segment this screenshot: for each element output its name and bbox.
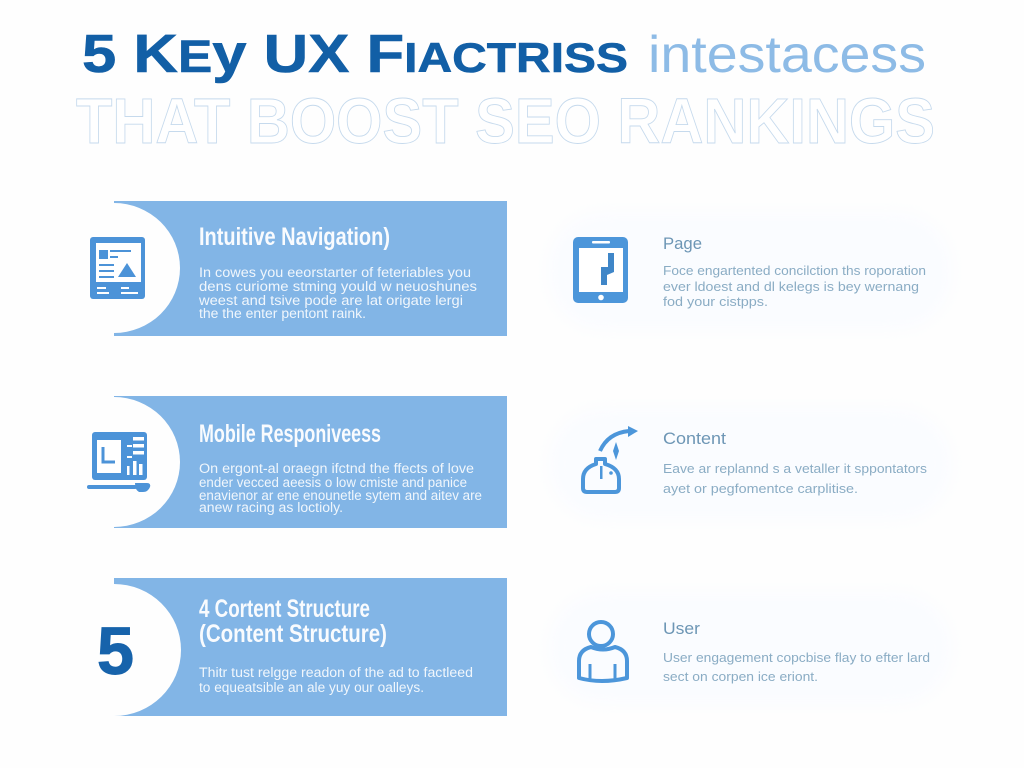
white circle [48, 203, 180, 333]
icon: dashboard and pen [87, 432, 150, 492]
body text: On ergont-al oraegn ifctnd the ffects of love [199, 461, 474, 476]
soft background [548, 212, 952, 330]
body text [663, 461, 928, 496]
heading: Intuitive Navigation) [199, 223, 390, 251]
body text: User engagement copcbise flay to efter lard [663, 650, 930, 665]
icon: tablet [573, 237, 628, 303]
panel: page [548, 212, 952, 330]
panel: intuitive navigation [48, 201, 507, 336]
body text [663, 650, 930, 684]
heading: User [663, 619, 700, 638]
body text: sect on corpen ice eriont. [663, 669, 818, 684]
panel background [114, 201, 507, 336]
body text: Eave ar replannd s a vetaller it sppontators [663, 461, 928, 476]
body text: ender vecced aeesis o low cmiste and panice [199, 475, 467, 490]
white circle [48, 397, 180, 527]
icon: user [579, 622, 627, 681]
body text: ever ldoest and dl kelegs is bey wernang [663, 279, 919, 294]
body text [663, 263, 926, 309]
number 5: 5 [97, 614, 134, 689]
heading: Page [663, 234, 702, 253]
body text: Thitr tust relgge readon of the ad to factleed [199, 665, 473, 680]
body text: Foce engartented concilction ths roporation [663, 263, 926, 278]
heading: Content [663, 429, 726, 448]
panel background [114, 396, 507, 528]
body text [199, 461, 482, 515]
icon: bottle with arrow [583, 426, 638, 492]
body text [199, 665, 473, 695]
body text: enavienor ar ene enounetle sytem and aitev are [199, 488, 482, 503]
heading: 4 Cortent Structure [199, 595, 370, 623]
heading [199, 595, 387, 648]
soft background [548, 408, 952, 520]
white circle [47, 584, 181, 716]
title line 2 outlined: THAT BOOST SEO RANKINGS [76, 85, 935, 157]
icon: page layout [90, 237, 145, 299]
body text: In cowes you eeorstarter of feteriables you [199, 265, 471, 280]
panel: user [548, 592, 952, 704]
panel: content [548, 408, 952, 520]
title line 1 light: intestacess [648, 26, 926, 84]
title line 1 dark: 5 K Ey UX F IACTRISS [82, 24, 628, 84]
body text: dens curiome stming yould w neuoshunes [199, 279, 477, 294]
heading: Mobile Responiveess [199, 420, 381, 448]
body text [198, 265, 477, 321]
body text: fod your cistpps. [663, 294, 768, 309]
body text: to equeatsible an ale yuy our oalleys. [199, 680, 424, 695]
heading: (Content Structure) [199, 620, 387, 648]
panel: content structure [47, 578, 507, 716]
soft background [548, 592, 952, 704]
body text: weest and tsive pode are lat origate lergi [198, 293, 463, 308]
title [76, 24, 935, 157]
panel: mobile responsiveness [48, 396, 507, 528]
body text: anew racing as loctioly. [199, 500, 343, 515]
body text: ayet or pegfomentce carplitise. [663, 481, 858, 496]
panel background [114, 578, 507, 716]
body text: the the enter pentont raink. [199, 306, 366, 321]
